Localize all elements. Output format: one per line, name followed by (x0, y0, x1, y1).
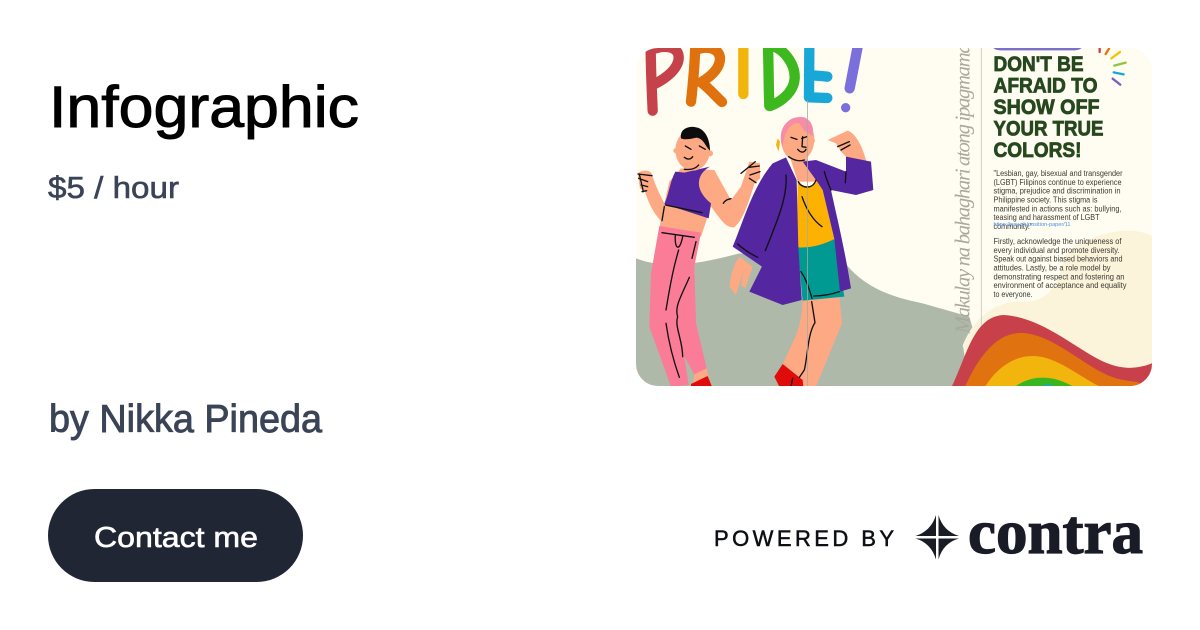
button: contact me (48, 489, 303, 582)
body text: second paragraph: demonstrating respect and fostering an (994, 272, 1124, 282)
vertical script text: Makulay na bahaghari atong ipagmama (952, 43, 974, 334)
icon: contra star (916, 515, 959, 560)
right column artwork (940, 43, 1153, 387)
heading: don't be afraid: COLORS! (994, 138, 1082, 162)
heading: don't be afraid: DON'T BE (994, 52, 1084, 76)
centre fold line (807, 100, 808, 386)
rainbow wave (952, 315, 1153, 387)
body text: second paragraph: every individual and promote diversity. (994, 246, 1120, 255)
body text: first paragraph: Philippine society. This stigma is (994, 196, 1098, 204)
sage curve (954, 345, 964, 382)
body text: first paragraph: teasing and harassment of LGBT (994, 213, 1100, 222)
figure: left dancer (638, 127, 760, 387)
body text: second paragraph: attitudes. Lastly, be a role model by (994, 264, 1111, 272)
body text: first paragraph: community." (994, 222, 1033, 231)
body text: first paragraph: "Lesbian, gay, bisexual and transgender (994, 169, 1123, 178)
cream blob (962, 230, 1152, 368)
title: Infographic (49, 75, 359, 140)
button: contact me: Contact me (94, 522, 258, 554)
body text: second paragraph: environment of acceptance and equality (994, 281, 1127, 290)
body text: second paragraph: Speak out against biased behaviors and (994, 254, 1122, 264)
divider (980, 48, 982, 326)
purple pill (993, 48, 1082, 50)
body text: second paragraph: Firstly, acknowledge the uniqueness of (994, 237, 1122, 246)
figure: right dancer (729, 117, 873, 387)
powered by label: POWERED BY (714, 526, 894, 551)
wordmark: contra (968, 499, 1143, 567)
pride lettering (651, 45, 858, 111)
body text: first paragraph: stigma, prejudice and discrimination in (994, 186, 1120, 196)
price: $5 / hour (48, 170, 179, 205)
body text: first paragraph: (LGBT) Filipinos continue to experience (994, 178, 1122, 187)
heading: don't be afraid: SHOW OFF (994, 95, 1100, 119)
left artwork (636, 45, 989, 387)
author: by Nikka Pineda (49, 398, 322, 441)
body text: second paragraph: to everyone. (994, 290, 1032, 299)
body text: second paragraph (994, 237, 1127, 299)
heading: don't be afraid: YOUR TRUE (994, 116, 1104, 140)
source link: https://pay.ph/position-paper/11 (994, 222, 1071, 228)
panel: infographic preview (636, 43, 1153, 387)
contra logo (916, 499, 1143, 567)
sun rays (1100, 48, 1126, 85)
sage hill (636, 253, 989, 387)
heading: don't be afraid (994, 52, 1104, 162)
heading: don't be afraid: AFRAID TO (994, 74, 1098, 98)
body text: first paragraph: manifested in actions such as: bullying, (994, 204, 1122, 214)
body text: first paragraph (994, 169, 1123, 231)
